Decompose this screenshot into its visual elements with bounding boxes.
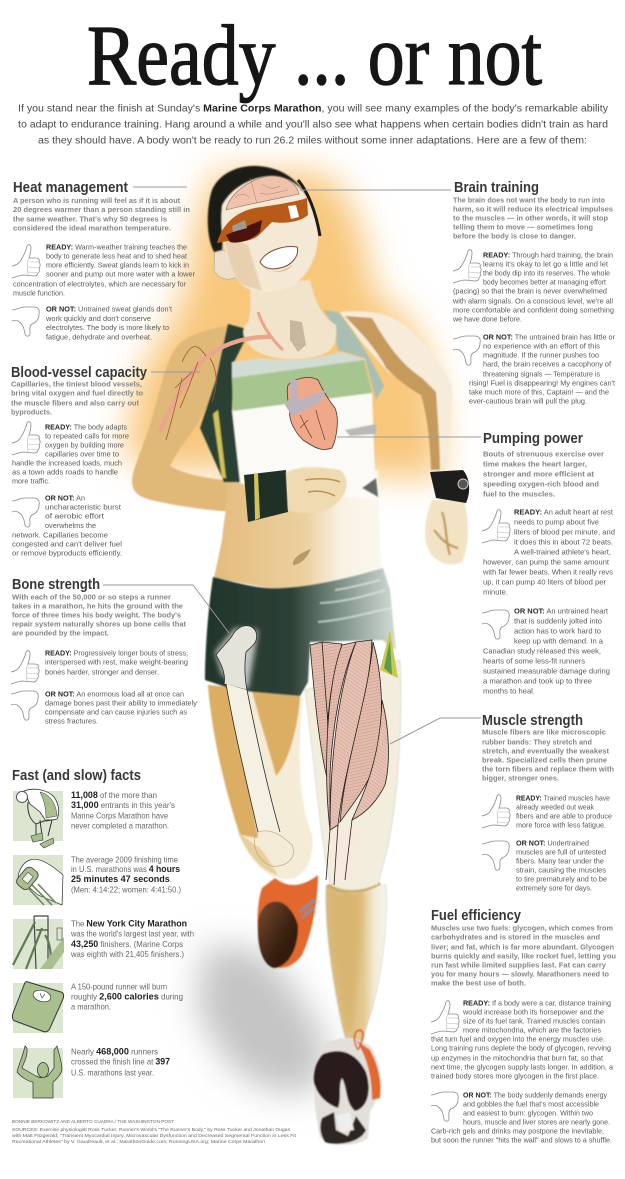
ready text: muscle function. — [13, 288, 65, 298]
fact: first marathon: 11,008 of the more than — [71, 789, 157, 800]
heading: Bone strength — [12, 577, 100, 593]
heading: Blood-vessel capacity — [11, 365, 147, 381]
icon: hand with stopwatch — [13, 855, 63, 905]
or not text: OR NOT: Untrained sweat glands don't — [46, 304, 172, 314]
fact: new york: The New York City Marathon — [71, 918, 187, 928]
intro: fuel to the muscles. — [483, 490, 555, 498]
ready text — [482, 508, 615, 596]
intro: bring vital oxygen and fuel directly to — [11, 388, 143, 398]
panel: fast and slow facts — [12, 768, 194, 1098]
or not text: no experience with an effort of this — [483, 342, 600, 350]
intro: you for many hours — slowly. Marathoners need to — [431, 970, 609, 978]
or not text: months to heal. — [483, 686, 535, 696]
ready text: up, it can pump 40 liters of blood per — [483, 578, 607, 586]
or not text: strain, causing the muscles — [516, 866, 606, 874]
brain — [226, 176, 299, 210]
intro: harm, so it will reduce its electrical impulses — [453, 204, 613, 214]
intro: to the muscles — in other words, it will stop — [453, 214, 608, 222]
near hand — [286, 467, 347, 513]
or not text: ever-cautious brain will pull the plug. — [469, 396, 587, 406]
or not text — [483, 606, 610, 696]
ready text: with far fewer beats. When it really revs — [482, 568, 613, 576]
ready text: more mitochondria, which are the factories — [463, 1026, 601, 1034]
or not text: uncharacteristic burst — [45, 502, 121, 512]
ready text: READY: If a body were a car, distance training — [463, 998, 611, 1008]
or not text: keep up with demand. In a — [514, 636, 604, 646]
or not text: hard, the brain receives a cacophony of — [483, 360, 612, 368]
ready text: capillaries over time to — [45, 450, 119, 458]
or not text: damage bones past their ability to immediately — [45, 698, 197, 708]
fact: finishing time: in U.S. marathons was 4 hours — [71, 863, 180, 874]
intro: 20 degrees warmer than a person standing still in — [13, 205, 190, 214]
intro: carbohydrates and is stored in the muscles and — [431, 932, 600, 942]
ready text: minute. — [483, 588, 508, 596]
left ear — [214, 250, 238, 279]
ready text: A well-trained athlete's heart, — [514, 548, 611, 556]
or not text: fibers. Many tear under the — [516, 856, 604, 866]
far arm and hand — [340, 311, 468, 564]
or not text: electrolytes. The body is more likely to — [46, 323, 169, 332]
ready text: concentration of electrolytes, which are necessary for — [13, 280, 187, 288]
intro text: to adapt to endurance training. Hang around a while and you'll also see what happens when certain bodies didn't train as hard — [18, 120, 608, 130]
heading: Brain training — [454, 180, 539, 196]
or not text — [45, 304, 172, 342]
ready text: up enzymes in the mitochondria that burn fat, so that — [431, 1054, 603, 1062]
femur bone — [215, 628, 258, 690]
intro — [11, 380, 143, 416]
torso skin — [214, 470, 381, 590]
or not text: threatening signals — Temperature is — [483, 370, 600, 378]
intro: rubber bands: They stretch and — [482, 738, 592, 746]
fact: calories — [71, 982, 183, 1012]
or not text: congested and can't deliver fuel — [12, 540, 122, 548]
icon: thumbs up — [12, 422, 40, 455]
ready text: next time, the glycogen supply lasts longer. In addition, a — [431, 1062, 614, 1072]
or not text: Canadian study released this week, — [483, 646, 601, 656]
or not text: take much more of this, Captain! — and the — [469, 388, 609, 396]
or not text: OR NOT: An enormous load all at once can — [45, 690, 184, 698]
or not text: and easiest to burn: glycogen. Within two — [463, 1108, 593, 1118]
intro — [453, 196, 613, 240]
ready text — [452, 250, 614, 324]
intro — [431, 924, 616, 988]
or not text: stress fractures. — [45, 716, 98, 726]
ready text: needs to pump about five — [514, 518, 599, 526]
panel: muscle strength — [482, 713, 614, 892]
ready text: body becomes better at managing effort — [483, 278, 606, 286]
ready text: more force with less fatigue. — [516, 820, 606, 830]
or not text: work quickly and don't conserve — [45, 314, 151, 323]
ready text: READY: Progressively longer bouts of stress, — [45, 648, 188, 658]
ready text: already weeded out weak — [516, 802, 594, 812]
lifted shoe — [258, 875, 318, 968]
icon: thumbs up — [431, 1001, 459, 1034]
fact: finishing time: The average 2009 finishing time — [71, 856, 178, 864]
ready text — [516, 794, 612, 830]
icon: thumbs down — [12, 307, 39, 336]
ready text: size of its fuel tank. Trained muscles contain — [463, 1016, 605, 1026]
ready text: body to generate less heat and to shed heat — [46, 252, 187, 260]
calf shading — [330, 892, 362, 1032]
intro: considered the ideal marathon temperature. — [13, 224, 171, 232]
fact: first marathon: Marine Corps Marathon have — [71, 812, 168, 820]
heading: Pumping power — [483, 431, 583, 447]
intro: stronger and more efficient at — [483, 470, 595, 478]
ready text: we have done before. — [452, 314, 522, 324]
or not text: OR NOT: The untrained brain has little or — [483, 332, 616, 342]
or not text: fatigue, dehydrate and overheat. — [46, 332, 152, 342]
heading: Muscle strength — [482, 713, 583, 729]
credits and sources: Recreational Athletes" by V. Gaudreault, et al.; MarathonGuide.com; RunningUSA.org; Marine Corps Marathon — [12, 1139, 265, 1144]
knee crease — [328, 883, 380, 892]
ready text: the body dip into its reserves. The whole — [483, 268, 610, 278]
ready text: as a town adds roads to handle — [12, 468, 118, 476]
or not text: extremely sore for days. — [516, 884, 592, 892]
ready text: learns it's okay to let go a little and let — [483, 260, 608, 268]
ready text: fibers and are able to produce — [516, 812, 612, 820]
thigh muscles — [310, 640, 388, 885]
intro: telling them to move — sometimes long — [453, 222, 593, 232]
bent leg thigh and knee — [208, 685, 312, 879]
ready text: READY: Warm-weather training teaches the — [46, 242, 187, 252]
ready text: more traffic. — [12, 476, 50, 486]
intro — [483, 450, 604, 498]
fact: new york: was eighth with 21,405 finishers.) — [70, 950, 184, 959]
or not text: to tire prematurely and to be — [516, 874, 607, 884]
planted shoe — [314, 1030, 381, 1145]
supporting lower leg — [326, 885, 386, 1042]
face — [221, 176, 318, 292]
intro: With each of the 50,000 or so steps a runner — [12, 592, 171, 602]
or not text: hours, muscle and liver stores are nearly gone. — [463, 1118, 610, 1126]
ready text: bones harder, stronger and denser. — [45, 668, 159, 676]
shorts highlights — [318, 580, 392, 622]
intro: liver; and fat, which is far more abundant. Glycogen — [431, 942, 614, 952]
or not text: action has to work hard to — [514, 626, 601, 636]
icon: thumbs up — [482, 510, 510, 543]
panel: heat management — [12, 180, 196, 342]
icon: thumbs down — [482, 610, 509, 639]
or not text: sustained measurable damage during — [483, 666, 610, 676]
intro text: as they should have. A body won't be ready to run 26.2 miles without some inner adaptations. Here are a few of them: — [38, 136, 587, 146]
icon: thumbs up — [453, 250, 481, 283]
or not text — [12, 494, 122, 558]
orange heat glow — [125, 172, 440, 480]
or not text: OR NOT: An — [45, 494, 85, 502]
panel: bone strength — [11, 577, 197, 726]
near arm — [132, 325, 248, 512]
intro: force of three times his body weight. The body's — [12, 610, 181, 620]
icon: thumbs down — [11, 691, 38, 720]
fact: calories: A 150-pound runner will burn — [71, 982, 167, 992]
intro: repair system naturally shores up bone cells that — [12, 620, 187, 628]
fact: new york: 43,250 finishers. (Marine Corps — [71, 938, 183, 949]
shorts — [205, 568, 396, 696]
intro: are pounded by the impact. — [12, 628, 109, 638]
icon: thumbs down — [431, 1092, 458, 1121]
fact: first marathon: 31,000 entrants in this year's — [71, 799, 175, 810]
icon: thumbs up — [482, 795, 510, 828]
panel: blood-vessel capacity — [11, 365, 147, 558]
title: Ready ... or not — [87, 7, 542, 103]
credits and sources — [12, 1119, 297, 1144]
supporting thigh — [305, 660, 401, 890]
hair band on right side — [298, 180, 320, 236]
fact: total finishers — [71, 1046, 170, 1078]
intro text: If you stand near the finish at Sunday's Marine Corps Marathon, you will see many examples of the body's remarkable ability — [18, 104, 609, 114]
ready text: Long training runs deplete the body of glycogen, revving — [431, 1044, 611, 1052]
grey ground shadow — [196, 945, 328, 1092]
icon: thumbs down — [453, 336, 480, 365]
ready text — [431, 998, 614, 1080]
navel — [293, 549, 311, 565]
or not text — [45, 690, 197, 726]
intro: stretch, and eventually the weakest — [482, 746, 610, 756]
or not text: Carb-rich gels and drinks may postpone the inevitable, — [431, 1126, 604, 1136]
icon: thumbs down — [12, 498, 39, 527]
or not text: muscles are full of untested — [516, 848, 606, 856]
heart — [285, 378, 337, 450]
singlet — [200, 310, 384, 500]
or not text: OR NOT: The body suddenly demands energy — [463, 1090, 607, 1100]
intro: time makes the heart larger, — [483, 460, 587, 468]
sunglasses — [217, 198, 308, 243]
intro: speeding oxygen-rich blood and — [483, 480, 599, 488]
ready text — [45, 648, 188, 676]
panel: fuel efficiency — [431, 908, 616, 1144]
fact: calories: a marathon. — [71, 1002, 111, 1012]
or not text: rising! Fuel is disappearing! My engines can't — [469, 378, 615, 388]
credits and sources: SOURCES: Exercise physiologist Ross Tucker; Runner's World's "The Runner's Body," by Ross Tucker and Jonathan Dugas — [12, 1127, 291, 1132]
intro: takes in a marathon, he hits the ground with the — [12, 602, 183, 610]
icon: bent-over runner — [13, 789, 63, 848]
or not text: that is suddenly jolted into — [514, 616, 602, 626]
ready text: liters of blood per minute, and — [514, 528, 615, 536]
intro text — [18, 104, 609, 146]
blood vessels — [160, 312, 283, 440]
ready text: READY: The body adapts — [45, 422, 127, 432]
or not text — [431, 1090, 612, 1144]
or not text: of aerobic effort — [45, 512, 104, 520]
watch — [430, 470, 469, 503]
ready text: READY: An adult heart at rest — [514, 508, 613, 516]
intro: Bouts of strenuous exercise over — [483, 450, 604, 458]
ready text: more efficiently. Sweat glands learn to kick in — [46, 260, 189, 270]
ready text: that turn fuel and oxygen into the energy muscles use. — [431, 1034, 605, 1044]
intro: make the best use of both. — [431, 978, 526, 988]
fact: total finishers: Nearly 468,000 runners — [71, 1046, 158, 1056]
credits and sources: BONNIE BERKOWITZ AND ALBERTO CUADRA / THE WASHINGTON POST — [12, 1119, 174, 1124]
ready text: READY: Through hard training, the brain — [483, 250, 613, 260]
ready text: it does this in about 72 beats. — [514, 538, 613, 546]
intro: before the body is close to danger. — [453, 232, 576, 240]
or not text: network. Capillaries become — [12, 530, 108, 540]
or not text — [469, 332, 616, 406]
intro: the torn fibers and replace them with — [482, 764, 614, 774]
intro — [12, 592, 187, 638]
or not text: magnitude. If the runner pushes too — [483, 350, 599, 360]
heading: Heat management — [13, 180, 128, 196]
or not text: compensate and can cause injuries such as — [45, 708, 187, 716]
fact: finishing time: 25 minutes 47 seconds. — [71, 873, 172, 884]
ready text: (pacing) so that the brain is never overwhelmed — [453, 286, 607, 296]
icon: thumbs down — [482, 841, 509, 870]
fact: finishing time: (Men: 4:14:22; women: 4:41:50.) — [71, 886, 181, 894]
intro: The brain does not want the body to run into — [453, 196, 605, 204]
intro: break. Specialized cells then prune — [482, 756, 607, 764]
intro: the muscle fibers and also carry out — [11, 398, 140, 408]
or not text: hearts of some less-fit runners — [483, 656, 585, 666]
ready text: trained body stores more glycogen in the first place. — [431, 1072, 599, 1080]
fact: total finishers: crossed the finish line at 397 — [71, 1056, 170, 1066]
or not text: OR NOT: Undertrained — [516, 838, 589, 848]
ready text: oxygen by building more — [45, 440, 124, 450]
illustration: runner with anatomy overlays — [125, 166, 469, 1145]
intro — [482, 728, 614, 782]
ready text: handle the increased loads, much — [12, 458, 122, 468]
or not text: and gobbles the fuel that's most accessible — [463, 1100, 599, 1108]
intro: A person who is running will feel as if it is about — [13, 196, 181, 205]
panel: pumping power — [482, 431, 615, 696]
hair — [208, 166, 320, 252]
shorts side stripe — [380, 630, 398, 678]
fact: new york — [70, 918, 194, 959]
intro: bigger, stronger ones. — [482, 774, 559, 782]
or not text: a marathon and took up to three — [483, 676, 592, 686]
ready text: however, can pump the same amount — [483, 558, 609, 566]
intro: burns quickly and easily, like rocket fuel, letting you — [431, 952, 616, 960]
or not text: OR NOT: An untrained heart — [514, 606, 608, 616]
panel: brain training — [452, 180, 616, 406]
fact: first marathon: never completed a marathon. — [71, 822, 169, 830]
ready text: READY: Trained muscles have — [516, 794, 610, 802]
or not text: but soon the runner "hits the wall" and slows to a shuffle. — [431, 1136, 612, 1144]
ready text: to repeated calls for more — [45, 432, 129, 440]
ready text — [12, 422, 129, 486]
heading: Fuel efficiency — [431, 908, 521, 924]
ready text: interspersed with rest, make weight-bearing — [45, 658, 188, 666]
intro: the same weather. That's why 50 degrees is — [13, 214, 167, 224]
intro — [13, 196, 190, 232]
or not text: overwhelms the — [45, 521, 96, 530]
or not text — [516, 838, 607, 892]
intro: Muscle fibers are like microscopic — [482, 728, 606, 736]
intro: Muscles use two fuels: glycogen, which comes from — [431, 924, 613, 932]
ready text: more comfortable and confident doing something — [453, 306, 614, 314]
fact: new york: was the world's largest last year, with — [70, 930, 194, 938]
ready text — [13, 242, 196, 298]
fact: finishing time — [71, 856, 181, 894]
icon: bathroom scale — [12, 982, 64, 1033]
intro: run fast while limited supplies last. Fat can carry — [431, 960, 607, 970]
credits and sources: with Matt Fitzgerald; "Transient Myocardial Injury, Microvascular Dysfunction and Decreased Segmental Function in Less Fit — [12, 1133, 297, 1138]
fact: total finishers: U.S. marathons last year. — [71, 1068, 154, 1078]
fact: calories: roughly 2,600 calories during — [71, 990, 183, 1002]
icon: thumbs up — [11, 651, 39, 684]
ready text: would increase both its horsepower and the — [462, 1008, 604, 1016]
ready text: with alarm signals. On a conscious level, we're all — [452, 296, 613, 306]
or not text: or remove byproducts efficiently. — [12, 548, 122, 558]
intro: Capillaries, the tiniest blood vessels, — [11, 380, 142, 388]
heading: Fast (and slow) facts — [12, 768, 141, 784]
ready text: sooner and pump out more water with a lower — [46, 270, 196, 278]
icon: bridge — [13, 916, 64, 969]
callout lines — [103, 187, 481, 744]
mouth — [260, 247, 298, 269]
wristband — [244, 470, 288, 522]
neck and chest — [243, 280, 336, 359]
icon: thumbs up — [12, 245, 40, 278]
icon: arms raised finisher — [13, 1046, 63, 1098]
fact: first marathon — [71, 789, 175, 830]
intro: byproducts. — [11, 408, 52, 416]
